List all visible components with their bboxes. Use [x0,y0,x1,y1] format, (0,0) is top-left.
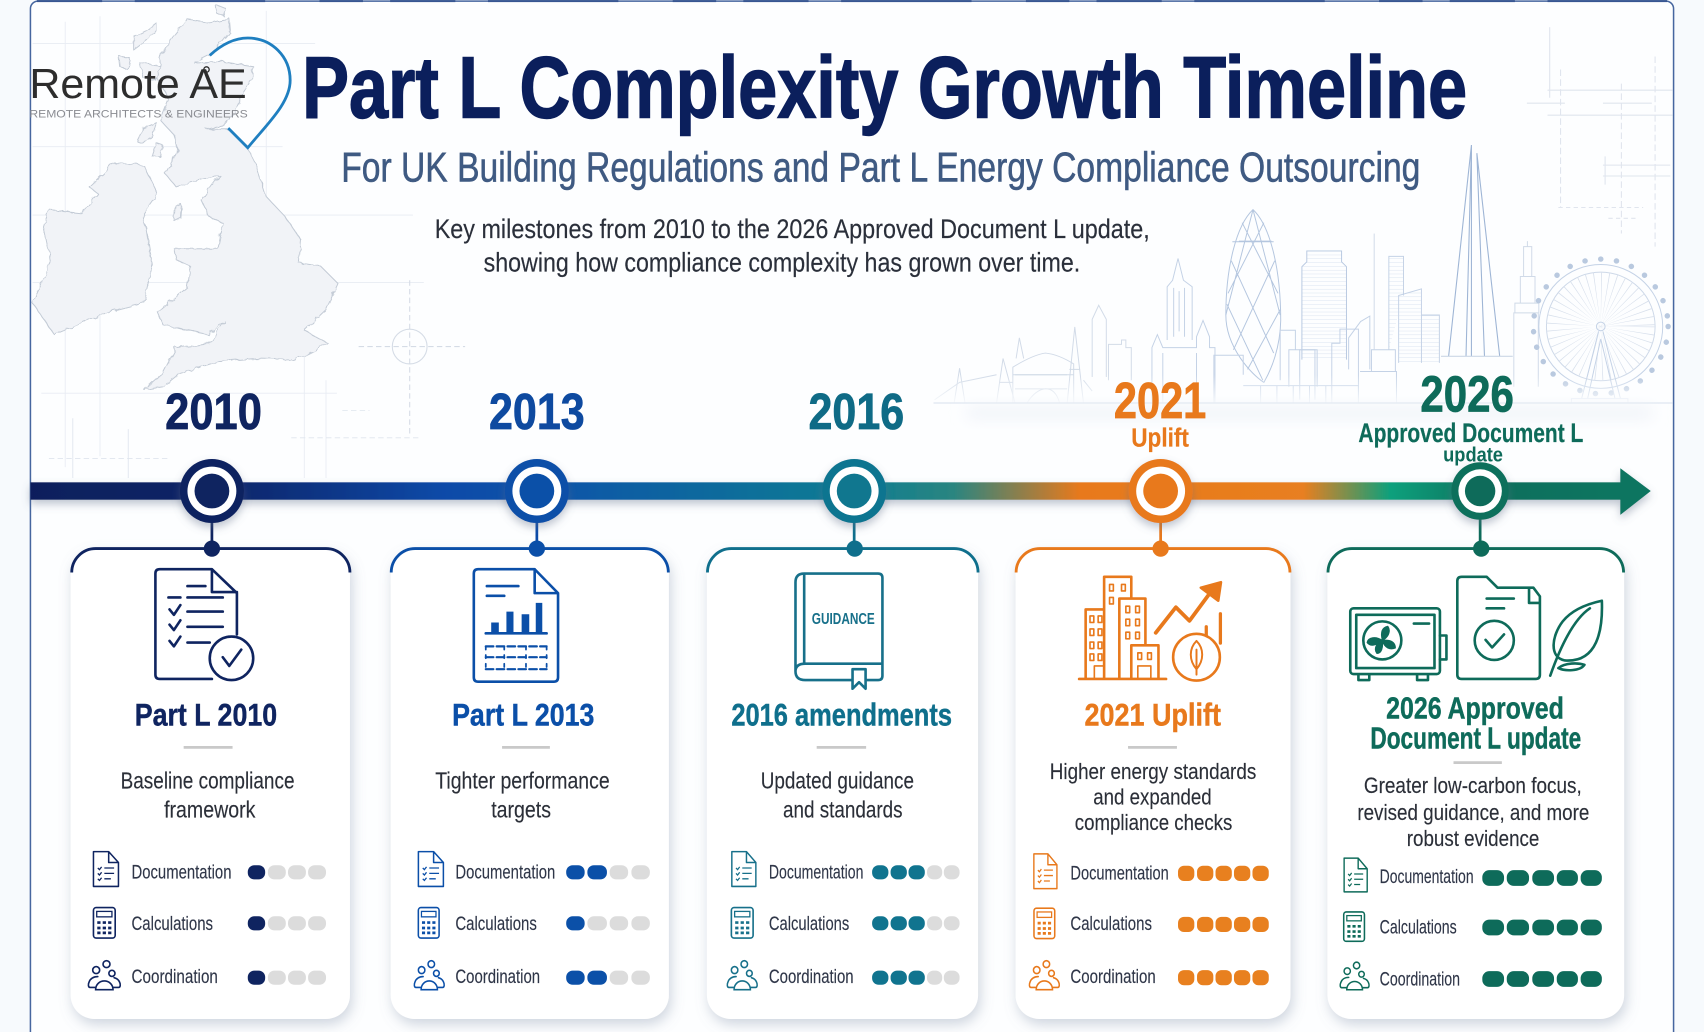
year label 2026 Approved Document L update: Approved Document L [1358,417,1583,448]
marker 2016 [822,459,886,549]
row: documentation rating 1 of 4: Documentation [131,861,231,883]
row: calculations rating 5 of 5: Calculations [1380,917,1457,939]
intro text: Key milestones from 2010 to the 2026 Approved Document L update, [435,213,1150,244]
card description: robust evidence [1407,826,1539,851]
card description [1050,759,1256,835]
card heading: 2021 Uplift [1085,697,1221,733]
icon: guidance book [795,574,882,689]
ground mist [934,375,1672,403]
row: calculations rating 3 of 5 [731,908,960,938]
logo wordmark: Remote AE [29,61,247,107]
year label 2021 Uplift: Uplift [1131,422,1189,452]
row: documentation rating 2 of 4 [418,852,650,886]
card description: Tighter performance [435,768,610,794]
card description [435,768,610,822]
row: documentation rating 2 of 4: Documentation [455,861,555,883]
card description [761,768,914,822]
London skyline illustration [934,145,1672,418]
icon: checklist document [155,569,253,680]
year label 2021 Uplift [1114,372,1206,452]
panel: card 2010 [71,540,350,1019]
row: documentation rating 5 of 5 [1344,858,1602,892]
year label 2016: 2016 [809,383,904,440]
year label 2021 Uplift: 2021 [1114,372,1206,429]
marker 2026 [1451,462,1509,549]
row: coordination rating 1 of 4 [88,961,326,990]
marker 2021 [1129,459,1193,549]
card heading: Part L 2013 [452,697,594,733]
Shard [1441,145,1513,356]
row: coordination rating 5 of 5 [1029,961,1269,990]
card description: and standards [783,796,903,822]
logo strapline: REMOTE ARCHITECTS & ENGINEERS [29,108,248,120]
icon: buildings, growth arrow and leaf [1079,577,1221,681]
row: calculations rating 1 of 4: Calculations [455,913,537,935]
marker 2010 [180,459,244,549]
card description: Updated guidance [761,768,914,794]
row: documentation rating 5 of 5: Documentation [1380,866,1474,888]
row: calculations rating 5 of 5 [1034,908,1269,939]
blueprint crosshair [359,280,465,435]
card description [121,768,295,822]
marker 2013 [505,459,569,549]
card description: targets [491,796,551,822]
row: calculations rating 3 of 5: Calculations [769,913,849,935]
row: documentation rating 5 of 5 [1034,854,1269,889]
card heading: Part L 2010 [135,697,277,733]
year label 2013: 2013 [489,383,585,440]
row: coordination rating 3 of 5 [727,961,960,990]
card description: compliance checks [1075,810,1232,835]
blueprint grid background left [33,11,424,478]
year label 2026 Approved Document L update: update [1443,444,1503,467]
London Eye [1533,259,1668,403]
row: coordination rating 5 of 5 [1340,962,1602,990]
row: coordination rating 2 of 4 [414,961,650,990]
panel: card 2013 [391,540,669,1019]
row: calculations rating 1 of 4 [418,908,650,938]
blueprint lines top right [1527,27,1672,247]
row: calculations rating 1 of 4: Calculations [131,913,213,935]
card description [1357,773,1589,851]
right tower [1514,241,1539,387]
office tower [1302,251,1346,360]
card description: Higher energy standards [1050,759,1256,784]
card heading: 2016 amendments [731,697,952,733]
year label 2010: 2010 [165,383,262,440]
row: coordination rating 5 of 5: Coordination [1380,968,1460,990]
card description: and expanded [1093,784,1212,809]
title: Part L Complexity Growth Timeline [302,39,1467,136]
intro text: showing how compliance complexity has grown over time. [484,247,1080,278]
icon: guidance book: GUIDANCE [812,611,875,628]
logo pin outline [210,38,290,148]
UK and Ireland map [33,4,338,390]
panel: card 2021 [1016,540,1290,1019]
row: documentation rating 3 of 5: Documentation [769,861,863,883]
Gherkin [1226,210,1281,382]
icon: report document with bar chart [474,569,558,682]
card description: Greater low-carbon focus, [1364,773,1582,798]
icon: heat pump, document and leaf [1350,577,1602,680]
Tower Bridge and dome [935,305,1131,403]
card description: framework [164,796,256,822]
year label 2026 Approved Document L update: 2026 [1420,366,1514,423]
panel: card 2016 [707,540,978,1019]
card heading: Document L update [1370,721,1581,755]
timeline arrow [30,468,1651,515]
row: coordination rating 2 of 4: Coordination [455,966,540,988]
row: calculations rating 1 of 4 [93,908,326,938]
year label 2026 Approved Document L update [1358,366,1583,467]
row: coordination rating 3 of 5: Coordination [769,966,854,988]
row: coordination rating 1 of 4: Coordination [131,966,218,988]
church tower and hall [1152,259,1215,403]
row: calculations rating 5 of 5: Calculations [1070,913,1152,935]
card description: revised guidance, and more [1357,800,1589,825]
row: documentation rating 5 of 5: Documentation [1070,862,1169,884]
card heading [1370,692,1581,755]
logo [29,38,290,148]
intro text [435,213,1150,278]
row: coordination rating 5 of 5: Coordination [1070,966,1156,988]
panel: card 2026 [1327,540,1624,1019]
row: calculations rating 5 of 5 [1344,912,1602,941]
subtitle: For UK Building Regulations and Part L Energy Compliance Outsourcing [341,144,1420,190]
card description: Baseline compliance [121,768,295,794]
row: documentation rating 3 of 5 [732,852,960,886]
card heading: 2026 Approved [1386,692,1564,726]
row: documentation rating 1 of 4 [93,852,326,886]
mid-rise towers [1373,234,1375,350]
